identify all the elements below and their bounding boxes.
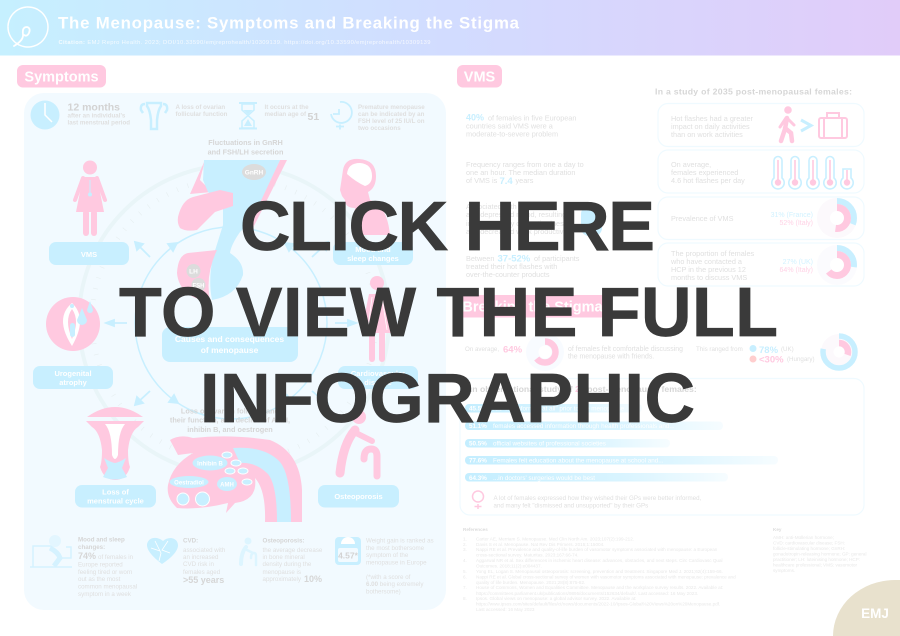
text: weight gain stat: symptom of the (366, 552, 409, 559)
text: associated: and depressed mood, resulting (466, 210, 566, 219)
fact: follicular function (141, 103, 228, 129)
list: references: 6. (463, 574, 467, 580)
key (773, 527, 866, 573)
icon: blue accent (581, 206, 602, 236)
text: loss of ovarian follicles: their function, and decline of AMH, (170, 416, 290, 424)
text: GP quote: A lot of females expressed how they wished their GPs were better informed, (494, 495, 702, 502)
legend: <30% Hungary: <30% (759, 354, 784, 366)
figure: osteoporosis (318, 410, 399, 508)
text: bone density stat: Osteoporosis: (262, 538, 304, 544)
text: bone density stat: 10% (304, 574, 322, 584)
text: bone density stat (262, 538, 323, 584)
text: frequency: Frequency ranges from one a day to (466, 160, 584, 169)
text: CVD stat: associated with (183, 547, 226, 554)
label: urogenital atrophy: Urogenital (54, 369, 92, 378)
icon: female symbol clock (331, 102, 352, 130)
fact: median age (239, 103, 319, 128)
call to action overlay: INFOGRAPHIC (200, 359, 695, 437)
header banner (0, 0, 900, 56)
bar: doctors' surgeries (465, 473, 728, 482)
text: ranged from: This ranged from (696, 346, 743, 353)
heading: Breaking the Stigma: Breaking the Stigma (462, 300, 604, 316)
text: prevalence: Prevalence of VMS (671, 214, 734, 223)
text: mood stat (78, 536, 137, 598)
text: 37-52%: over-the-counter products (466, 270, 550, 279)
text: loss of ovarian follicles (170, 406, 290, 434)
label: osteoporosis: Osteoporosis (334, 492, 383, 501)
label: GnRH (242, 164, 266, 180)
text: 37-52%: 37-52% (498, 254, 531, 264)
text: premature menopause: FSH level of 25 IU/L on (358, 118, 425, 125)
text: 40%: moderate-to-severe problem (466, 130, 558, 138)
cycle circle (135, 227, 327, 419)
icon: greater than (801, 120, 811, 131)
legend: prevalence values: 31% (France) (771, 212, 813, 219)
stat: mood and sleep changes (30, 535, 137, 598)
text: loss of ovarian function: follicular function (176, 111, 228, 118)
list: abbreviations: AMH: anti-Müllerian hormone; (773, 535, 834, 540)
heading: key: Key (773, 527, 782, 532)
label: GnRH: GnRH (245, 170, 264, 176)
heading: Breaking the Stigma (457, 295, 608, 318)
text: frequency (466, 160, 584, 187)
list: references: 3. (463, 547, 467, 552)
card: observational study (460, 378, 864, 515)
label: Inhibin B: Inhibin B (197, 462, 223, 468)
legend: <30% Hungary (750, 354, 815, 366)
bar: not informed (465, 404, 642, 412)
bar: education at school (465, 456, 778, 464)
label: cardiovascular disease (338, 366, 418, 389)
figure: VMS (49, 160, 129, 265)
label: mood and sleep changes: sleep changes (347, 254, 399, 263)
legend: 78% UK: (UK) (781, 346, 794, 353)
list: references: 1. (463, 536, 467, 542)
legend: HCP values: 64% (Italy) (780, 267, 813, 274)
text: associated (466, 202, 571, 236)
text: mood stat: common menopausal (78, 584, 137, 590)
heading: fluctuations: Fluctuations in GnRH (208, 138, 283, 147)
legend: HCP values (780, 259, 813, 274)
icon: sperm and egg logo (8, 7, 48, 47)
bar: doctors' surgeries: 64.3% (469, 475, 487, 482)
bar: doctors' surgeries: ...in doctors' surgeries would be best (493, 475, 595, 482)
text: bone density stat: the average decrease (262, 547, 323, 554)
text: mood stat: of females in (98, 554, 134, 561)
text: weight gain stat: (*with a score of (366, 574, 411, 581)
icon: woman with blood vessels (361, 276, 393, 362)
EMJ logo (833, 580, 900, 636)
list: references: Carter AE, Merriam S. Menopause. Med Clin North Am. 2023;107(2):199-212. (476, 536, 634, 542)
label: loss of menstrual cycle: Loss of (102, 488, 129, 496)
heading: VMS (457, 65, 502, 88)
figure: loss of menstrual cycle (75, 407, 156, 508)
icon: clock (30, 100, 60, 130)
text: mood stat: out as the most (78, 576, 121, 583)
list: abbreviations: follicle-stimulating hormone; GnRH: (773, 546, 845, 551)
title: The Menopause: Symptoms and Breaking the Stigma (58, 14, 520, 32)
text: comfortable: of females felt comfortable discussing (568, 346, 683, 353)
donut: prevalence (817, 198, 857, 238)
text: median age 51 (264, 104, 319, 123)
label: causes and consequences: of menopause (201, 345, 259, 355)
label: mood and sleep changes: Mood and (355, 245, 391, 254)
icon: walking person (780, 106, 794, 141)
text: comfortable (568, 346, 683, 360)
text: bone density stat: menopause is (262, 569, 301, 576)
label: FSH: FSH (192, 284, 204, 290)
list: references: Yong EL, Logan S. Menopausal osteoporosis: screening, prevention and treatment. Singapore Med J. 2021;62(4):159-66. (476, 569, 723, 574)
bar: health professionals (465, 422, 723, 430)
icon: hourglass (239, 103, 257, 128)
heading: Symptoms: Symptoms (24, 70, 99, 86)
text: associated: Associated with poor sleep (466, 202, 553, 211)
bar: health professionals: females accessed information through health professionals and... (493, 423, 675, 430)
text: premature menopause (358, 104, 425, 132)
label: LH: LH (189, 268, 198, 276)
list: abbreviations: symptoms. (773, 568, 795, 573)
text: 40% (466, 112, 576, 138)
figure: urogenital atrophy (33, 297, 113, 389)
heading: Symptoms (17, 65, 106, 88)
text: 37-52%: treated their hot flashes with (466, 262, 557, 271)
label: causes and consequences: Causes and consequences (175, 334, 284, 344)
list: references: 7. (463, 585, 467, 590)
text: hot flashes per day: 4.6 hot flashes per day (671, 176, 745, 185)
text: GP quote: and many felt "dismissed and unsupported" by their GPs (494, 502, 648, 510)
legend: prevalence values: 52% (Italy) (780, 220, 813, 227)
call to action overlay: TO VIEW THE FULL (119, 273, 778, 351)
stat: CVD (147, 538, 226, 585)
list: references: Outcomes. 2018;11(2):e004437. (476, 564, 542, 568)
list: references: 8. (463, 596, 467, 601)
text: loss of ovarian function: A loss of ovarian (176, 104, 225, 111)
list: references: 4. (463, 558, 467, 563)
text: CVD stat: CVD: (183, 538, 198, 544)
text: CVD stat: an increased (183, 554, 219, 561)
row: comfortable discussing (465, 333, 857, 371)
bar: official websites: 50.5% (469, 440, 487, 448)
icon: thermometers (772, 156, 853, 189)
icon: stooped figure with cane (340, 410, 377, 476)
VMS facts (466, 112, 602, 279)
list: abbreviations: CVD: cardiovascular disease; FSH: (773, 540, 845, 546)
text: 37-52%: of participants (534, 254, 580, 263)
diagram: pituitary (177, 160, 287, 301)
text: HCP: The proportion of females (671, 249, 754, 258)
text: median age 51: median age of (264, 111, 307, 118)
diagram: ovary (168, 436, 302, 522)
donut: range (821, 334, 857, 370)
text: loss of ovarian function (176, 104, 228, 118)
text: HCP: months to discuss VMS (671, 273, 747, 282)
text: weight gain stat: bothersome) (366, 588, 401, 596)
text: frequency: one an hour. The median duration (466, 168, 575, 177)
list: abbreviations (773, 535, 866, 573)
heading: fluctuations: and FSH/LH secretion (208, 148, 283, 156)
text: CVD stat: CVD risk in (183, 561, 214, 568)
list: references: https://committees.parliament.uk/publications/9895/documents/152634/default/. Last accessed: 16 May 2023. (476, 591, 698, 596)
text: 40%: 40% (466, 112, 484, 122)
text: 12 months: last menstrual period (68, 120, 130, 126)
fact: 12 months (30, 100, 130, 130)
text: loss of ovarian follicles: Loss of ovarian follicles and (181, 406, 279, 416)
call to action overlay (119, 187, 778, 437)
text: premature menopause: two occasions (358, 125, 401, 132)
list: abbreviations: gonadotropin-releasing hormone; GP: general (773, 552, 866, 556)
stat: weight gain (335, 537, 434, 596)
text: on average: On average, (465, 346, 499, 353)
text: impact (671, 114, 754, 139)
fact: premature menopause (331, 102, 425, 132)
figure: cardiovascular disease (338, 276, 418, 389)
list: references (463, 536, 736, 612)
text: CVD stat: >55 years (183, 575, 224, 585)
list: references: cross-sectional survey. Maturitas. 2023;167:66-74. (476, 552, 579, 558)
figure: mood and sleep (333, 159, 413, 265)
text: impact: impact on daily activities (671, 122, 750, 131)
text: hot flashes per day (671, 160, 745, 185)
text: median age 51: 51 (308, 111, 319, 123)
heading: observational study: An observational study of 29 post-menopausal females: (466, 384, 697, 394)
text: bone density stat: in bone mineral (262, 554, 305, 561)
EMJ logo: EMJ (861, 606, 889, 621)
text: premature menopause: Premature menopause (358, 104, 425, 111)
text: weight gain stat (366, 538, 434, 596)
heading: VMS: VMS (464, 70, 496, 86)
list: references: https://www.ipsos.com/sites/default/files/ct/news/documents/2022-10/Ipsos-Global%20Views%20on%20Menopause.pdf. (476, 602, 720, 606)
text: weight gain stat: menopause in Europe (366, 560, 427, 566)
text: frequency: of VMS is (466, 176, 498, 185)
bar: official websites: official websites of professional societies (493, 440, 606, 448)
label: LH (186, 264, 200, 278)
text: associated: and decreased work productivity (466, 227, 571, 236)
card: contacted HCP (658, 243, 864, 286)
text: GP quote (494, 495, 702, 510)
list: references: Davis S et al. Menopause. Nat Rev Dis Primers. 2015;1:15004. (476, 542, 604, 547)
heading: references: References (463, 527, 488, 532)
heading: fluctuations (208, 138, 283, 156)
icon: female symbol (473, 491, 484, 509)
text: HCP: who have contacted a (670, 257, 743, 266)
text: 37-52%: Between (466, 254, 494, 263)
icon: uterus (141, 103, 167, 129)
bar: official websites (465, 439, 670, 448)
label: loss of menstrual cycle (75, 485, 156, 508)
text: impact: Hot flashes had a greater (671, 114, 754, 123)
text: mood stat: changes: (78, 544, 105, 551)
text: hot flashes per day: females experienced (671, 168, 738, 177)
card: hot flash impact (658, 104, 864, 146)
icon: person at desk (30, 535, 72, 567)
list: references: quality of life burden. Menopause. 2021;28(8):875-82. (476, 580, 585, 585)
label: causes and consequences (162, 327, 298, 362)
text: frequency: 7.4 (500, 176, 513, 187)
text: impact: than on work activities (671, 130, 743, 139)
text: bone density stat: density during the (262, 561, 312, 568)
donut: 64% (526, 333, 564, 371)
text: HCP: HCP in the previous 12 (671, 265, 746, 274)
label: urogenital atrophy (33, 366, 113, 389)
text: hot flashes per day: On average, (671, 160, 711, 169)
text: premature menopause: can be indicated by an (358, 111, 425, 118)
list: abbreviations: healthcare professional; VMS: vasomotor (773, 562, 857, 568)
label: Oestradiol: Oestradiol (174, 480, 204, 486)
text: frequency: years (516, 176, 534, 185)
legend: 78% UK: 78% (759, 345, 779, 356)
list: references: Nappi RE et al. Prevalence and quality-of-life burden of vasomotor symptoms associated with menopause: a European (476, 547, 718, 552)
references (463, 527, 736, 612)
list: references: Last accessed: 16 May 2023 (476, 607, 535, 612)
donut: HCP (817, 245, 857, 285)
citation: Citation: EMJ Repro Health. 2023; DOI/10.33590/emjreprohealth/10309139. https://doi.org/10.33590/emjreprohealth/10309139 (58, 40, 430, 46)
icon: woman with thermometer (75, 160, 105, 236)
text: comfortable: the menopause with friends. (568, 354, 654, 360)
bar: health professionals: 51.1% (469, 423, 487, 430)
bar: not informed: 45.5% (469, 406, 487, 412)
list: references: 2. (463, 542, 467, 547)
icon: stooped figure (241, 538, 256, 565)
icon: head with brain (340, 159, 390, 235)
text: mood stat: symptom in a week (78, 591, 132, 598)
card: prevalence of VMS (658, 197, 864, 240)
label: cardiovascular disease: Cardiovascular (351, 369, 405, 378)
bar: not informed: felt "not informed at all" prior to the menopause (493, 406, 625, 412)
label: mood and sleep changes (333, 242, 413, 265)
dial ring (79, 165, 389, 475)
card: hot flashes per day (658, 150, 864, 193)
text: CVD stat (183, 538, 226, 585)
text: 12 months: after an individual's (68, 112, 126, 120)
legend: prevalence values (771, 212, 813, 227)
list: references: Ipsos. Global views on menopause: a global advisor survey. 2022. Available at: (476, 596, 636, 601)
list: references: House of Commons, Women and Equalities Committee. Menopause and the workplace survey results. 2022. Available at: (476, 585, 723, 590)
label: loss of menstrual cycle: menstrual cycle (87, 496, 144, 506)
list: references: Aggarwal NR et al. Sex differences in ischemic heart disease: advances, obstacles, and next steps. Circ Cardiovasc Qual (476, 558, 723, 563)
text: bone density stat: approximately (262, 576, 302, 583)
follicles (177, 452, 252, 506)
legend: 78% UK (750, 345, 794, 356)
label: VMS: VMS (81, 250, 97, 259)
icon: uterus (86, 407, 144, 480)
text: associated: in lower quality of life, tiredness, (466, 219, 569, 228)
label: AMH: AMH (220, 482, 234, 488)
text: CVD stat: females aged (183, 569, 221, 576)
list: references: 5. (463, 569, 467, 574)
text: mood stat: Mood and sleep (78, 536, 125, 544)
label: cardiovascular disease: disease (364, 378, 392, 387)
text: mood stat: Europe reported (78, 562, 123, 568)
icon: heart with vessels (147, 538, 178, 564)
panel: symptoms (24, 93, 446, 610)
list: abbreviations: practitioner; LH: luteinising hormone; HCP: (773, 557, 860, 562)
text: 40%: countries said VMS were a (466, 122, 554, 130)
text: mood stat: feeling tired or worn (78, 569, 133, 576)
list: references: Nappi RE et al. Global cross-sectional survey of women with vasomotor symptoms associated with menopause: prevalence and (476, 574, 736, 580)
legend: HCP values: 27% (UK) (783, 259, 813, 266)
label: FSH (192, 278, 206, 292)
bar: education at school: 77.6% (469, 458, 487, 464)
icon: briefcase (819, 113, 847, 138)
text: mood stat: 74% (78, 551, 96, 561)
stat: 64%: 64% (503, 344, 523, 356)
text: weight gain stat: the most bothersome (366, 545, 425, 552)
text: 12 months: 12 months (68, 102, 120, 114)
heading: study of 2035: In a study of 2035 post-menopausal females: (655, 86, 852, 96)
label: urogenital atrophy: atrophy (59, 378, 88, 387)
call to action overlay: CLICK HERE (240, 187, 655, 265)
legend: <30% Hungary: (Hungary) (787, 356, 815, 363)
text: 40%: of females in five European (488, 114, 576, 122)
stat: bone density (241, 538, 323, 584)
arrows (106, 242, 356, 405)
text: loss of ovarian follicles: inhibin B, and oestrogen (187, 425, 273, 434)
text: 37-52% (466, 254, 580, 279)
text: weight gain stat: 6.00 being extremely (366, 581, 424, 588)
text: HCP (670, 249, 754, 282)
icon: weighing scale: 4.57* (338, 550, 359, 560)
bar: education at school: Females felt education about the menopause at school and... (493, 458, 664, 464)
icon: urogenital circle (46, 297, 100, 351)
text: median age 51: It occurs at the (264, 104, 309, 111)
text: 12 months (68, 102, 130, 126)
text: weight gain stat: Weight gain is ranked as (366, 538, 434, 544)
